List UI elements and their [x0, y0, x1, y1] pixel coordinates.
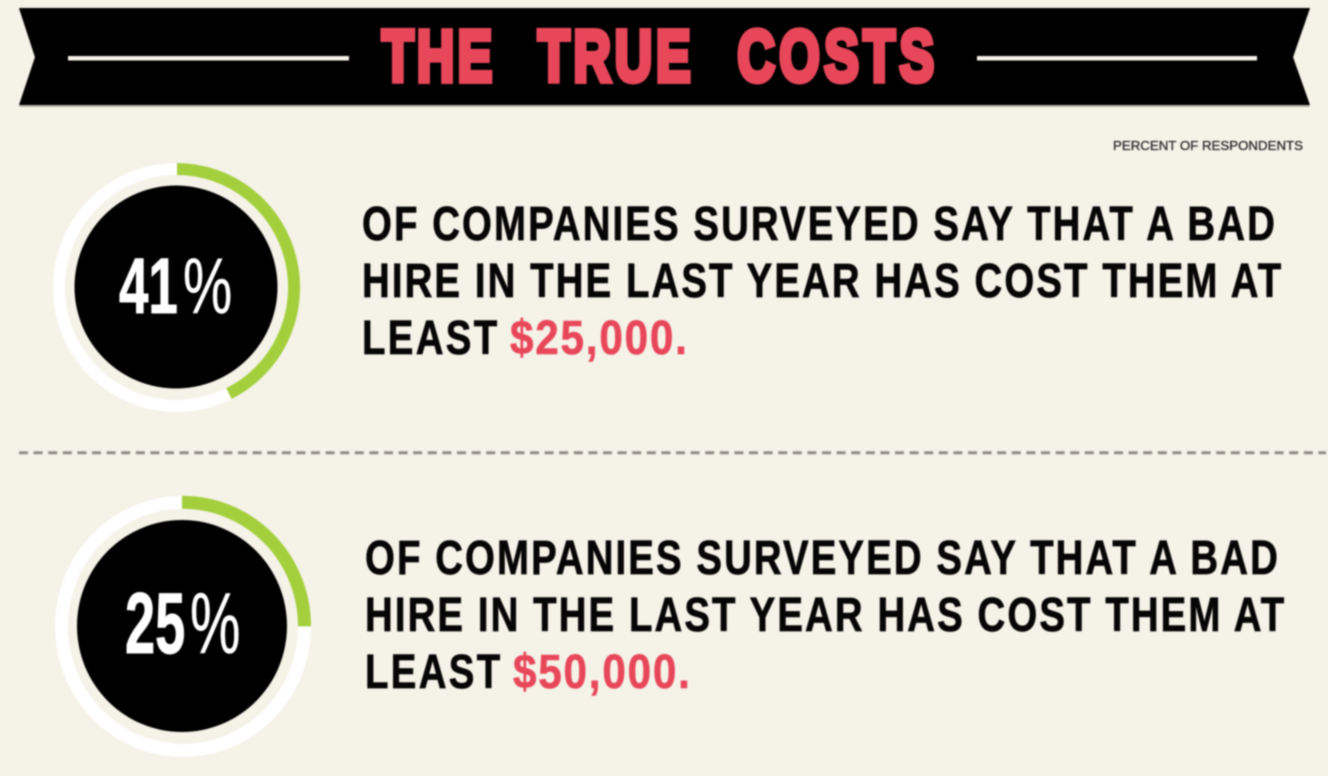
stat 2: 25% donut: [62, 502, 304, 750]
stat 2 description: HIRE IN THE LAST YEAR HAS COST THEM AT: [365, 589, 1285, 642]
title: COSTS: [738, 17, 934, 97]
stat 1 value: 41: [119, 243, 178, 331]
stat 2 value: [125, 576, 240, 672]
legend label: percent of respondents: PERCENT OF RESPONDENTS: [1113, 138, 1303, 153]
stat 1: 41% donut: [59, 169, 294, 406]
stat 1 description: LEAST: [362, 312, 498, 365]
title banner: [19, 8, 1310, 107]
stat 2 description: OF COMPANIES SURVEYED SAY THAT A BAD: [365, 532, 1278, 585]
stat 1 description: OF COMPANIES SURVEYED SAY THAT A BAD: [362, 198, 1275, 251]
title: TRUE: [538, 17, 691, 97]
stat 2 amount: $50,000.: [513, 644, 690, 699]
stat 1 description: HIRE IN THE LAST YEAR HAS COST THEM AT: [362, 255, 1282, 308]
stat 2 value: 25: [125, 576, 185, 672]
stat 2 description: LEAST: [365, 646, 501, 699]
title: [382, 17, 934, 97]
stat 2 description: [365, 532, 1285, 699]
stat 2 value: %: [190, 576, 240, 672]
stat 1 description: [362, 198, 1282, 365]
title: THE: [382, 17, 492, 97]
stat 1 value: %: [183, 242, 232, 330]
stat 1 amount: $25,000.: [510, 310, 687, 365]
stat 1 value: [119, 242, 232, 331]
